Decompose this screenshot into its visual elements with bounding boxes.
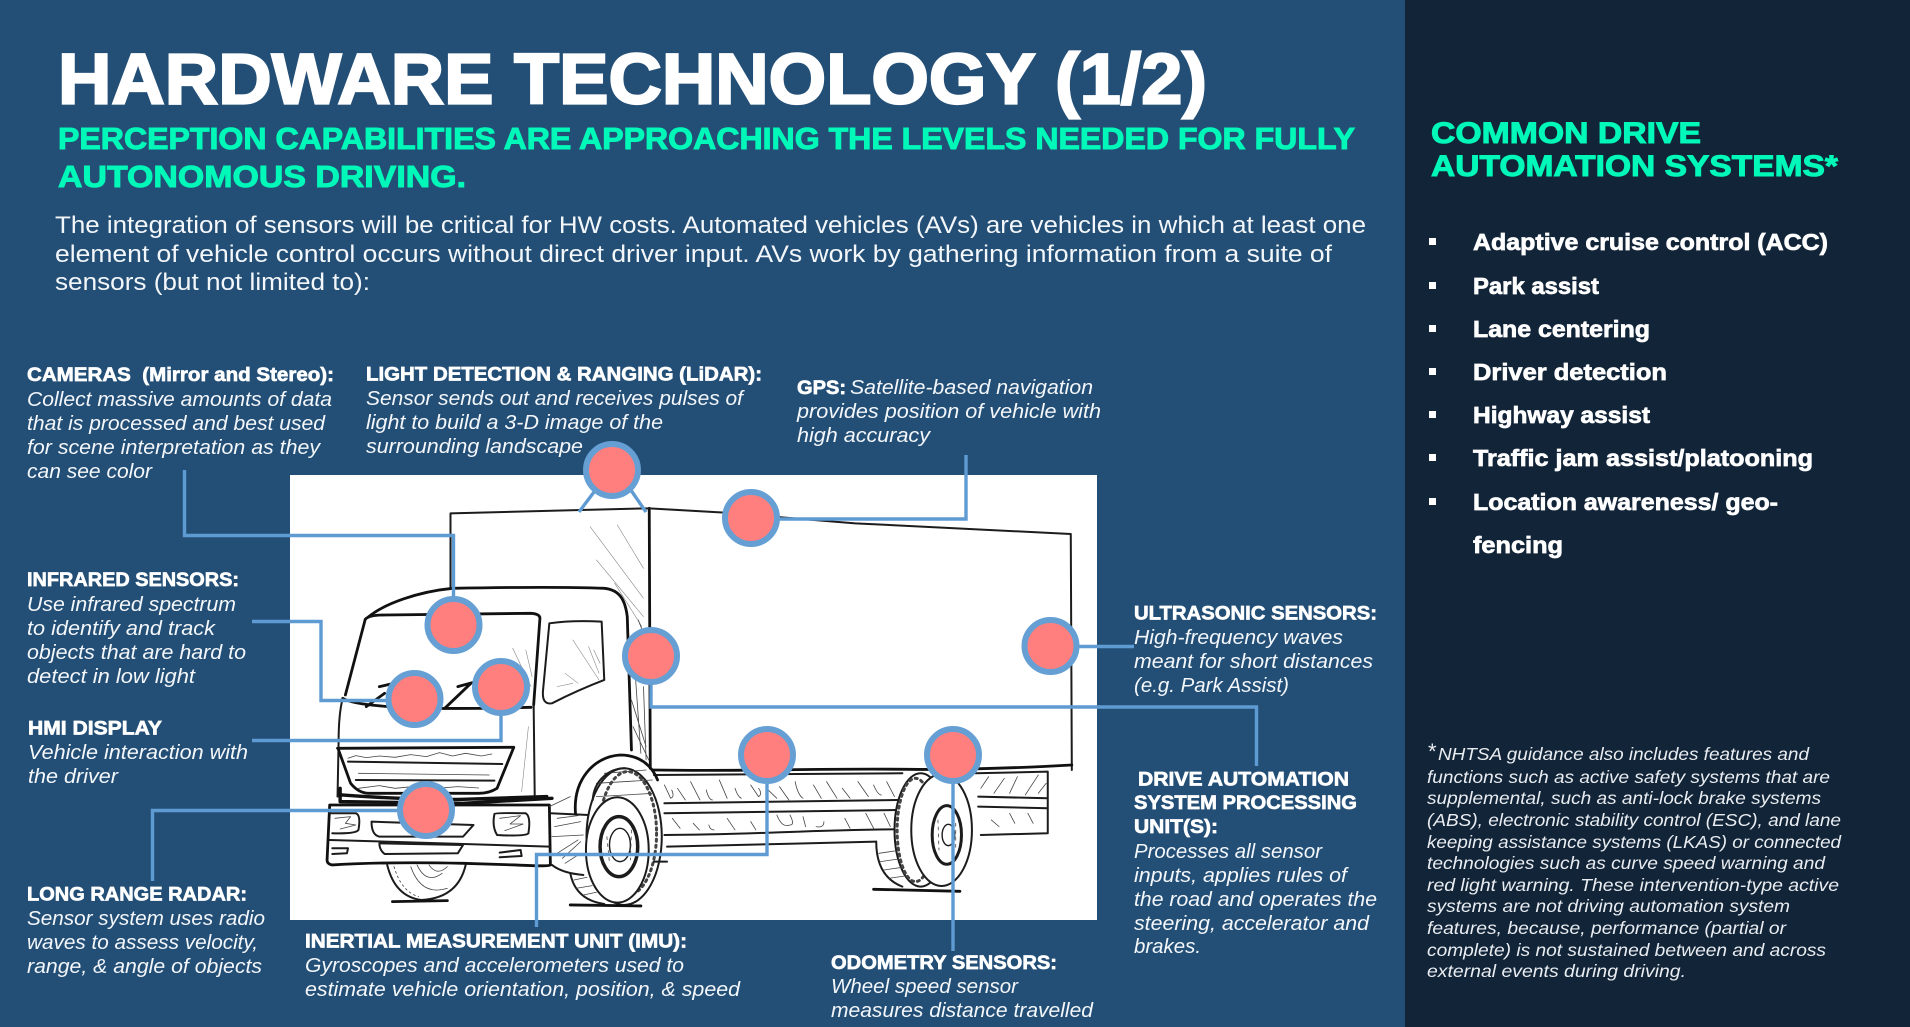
callout: drive automation system processing unit: UNIT(S): <box>1134 817 1218 838</box>
title: HARDWARE TECHNOLOGY (1/2) <box>58 40 1207 120</box>
callout: GPS: Satellite-based navigation <box>850 377 1093 399</box>
intro paragraph: sensors (but not limited to): <box>55 269 370 296</box>
callout: long range radar <box>27 784 452 978</box>
callout: GPS <box>725 377 1101 544</box>
callout: infrared sensors <box>27 570 440 725</box>
callout: inertial measurement unit: Gyroscopes and accelerometers used to <box>305 955 684 977</box>
callout: drive automation system processing unit: Processes all sensor <box>1134 841 1323 863</box>
callout: cameras: CAMERAS (Mirror and Stereo): <box>27 365 334 386</box>
subtitle <box>58 121 1355 194</box>
callout: odometry sensors: Wheel speed sensor <box>831 976 1019 998</box>
list: drive automation systems: Adaptive cruise control (ACC) <box>1473 229 1828 255</box>
callout: inertial measurement unit: estimate vehicle orientation, position, & speed <box>305 979 741 1001</box>
list: drive automation systems: Lane centering <box>1473 316 1650 342</box>
callout: drive automation system processing unit: the road and operates the <box>1134 889 1377 911</box>
callout: drive automation system processing unit: SYSTEM PROCESSING <box>1134 793 1357 814</box>
callout: drive automation system processing unit <box>625 630 1377 958</box>
callout: cameras: that is processed and best used <box>27 413 326 435</box>
callout: infrared sensors: detect in low light <box>27 666 197 688</box>
callout: ultrasonic sensors <box>1024 604 1377 697</box>
callout: LiDAR: LIGHT DETECTION & RANGING (LiDAR): <box>366 364 762 386</box>
intro paragraph: element of vehicle control occurs without direct driver input. AVs work by gathering information from a suite of <box>55 241 1332 268</box>
callout: infrared sensors: objects that are hard to <box>27 642 246 664</box>
callout: odometry sensors: ODOMETRY SENSORS: <box>831 953 1057 974</box>
subtitle: PERCEPTION CAPABILITIES ARE APPROACHING THE LEVELS NEEDED FOR FULLY <box>58 121 1355 156</box>
list: drive automation systems: Highway assist <box>1473 402 1650 428</box>
intro paragraph <box>55 212 1366 296</box>
callout: odometry sensors: measures distance travelled <box>831 1000 1094 1022</box>
list: drive automation systems <box>1429 229 1828 558</box>
callout: ultrasonic sensors: ULTRASONIC SENSORS: <box>1134 604 1377 624</box>
callout: infrared sensors: Use infrared spectrum <box>27 594 236 616</box>
callout: GPS: provides position of vehicle with <box>796 401 1101 423</box>
footnote: keeping assistance systems (LKAS) or connected <box>1427 832 1842 852</box>
callout: long range radar: waves to assess velocity, <box>27 932 258 954</box>
footnote: * <box>1428 739 1437 764</box>
truck illustration <box>327 508 1072 906</box>
callout: ultrasonic sensors: (e.g. Park Assist) <box>1134 675 1289 697</box>
callout: long range radar: Sensor system uses radio <box>27 908 265 930</box>
footnote: external events during driving. <box>1427 961 1686 981</box>
callout: long range radar: LONG RANGE RADAR: <box>27 884 247 906</box>
callout: GPS: high accuracy <box>797 425 931 447</box>
callout: drive automation system processing unit: DRIVE AUTOMATION <box>1138 770 1349 790</box>
callout: LiDAR: surrounding landscape <box>366 436 583 458</box>
footnote: features, because, performance (partial or <box>1427 918 1787 938</box>
callout: drive automation system processing unit: steering, accelerator and <box>1134 913 1370 935</box>
sidebar heading: COMMON DRIVE <box>1431 117 1701 150</box>
list: drive automation systems: Location awareness/ geo- <box>1473 489 1778 515</box>
subtitle: AUTONOMOUS DRIVING. <box>58 159 466 194</box>
footnote: supplemental, such as anti-lock brake systems <box>1427 788 1821 808</box>
footnote: red light warning. These intervention-type active <box>1427 875 1839 895</box>
list: drive automation systems: Traffic jam assist/platooning <box>1473 445 1813 471</box>
list: drive automation systems: Park assist <box>1473 273 1599 299</box>
list: drive automation systems: Driver detection <box>1473 359 1667 385</box>
callout: infrared sensors: INFRARED SENSORS: <box>27 570 239 591</box>
panel: right sidebar <box>1405 0 1910 1027</box>
callout: LiDAR <box>366 364 762 512</box>
callout: odometry sensors <box>831 729 1094 1022</box>
callout: LiDAR: Sensor sends out and receives pulses of <box>366 388 746 410</box>
callout: drive automation system processing unit: brakes. <box>1134 936 1201 958</box>
footnote <box>1427 739 1842 981</box>
intro paragraph: The integration of sensors will be critical for HW costs. Automated vehicles (AVs) are vehicles in which at least one <box>55 212 1366 239</box>
footnote: NHTSA guidance also includes features and <box>1438 744 1810 764</box>
callout: ultrasonic sensors: High-frequency waves <box>1134 627 1343 649</box>
footnote: technologies such as curve speed warning and <box>1427 853 1826 873</box>
sidebar heading <box>1431 117 1838 183</box>
callout: HMI display: Vehicle interaction with <box>28 742 248 764</box>
callout: inertial measurement unit: INERTIAL MEASUREMENT UNIT (IMU): <box>305 932 687 952</box>
callout: HMI display: the driver <box>28 766 119 788</box>
callout: cameras <box>27 365 480 651</box>
sidebar heading: AUTOMATION SYSTEMS* <box>1431 150 1838 183</box>
callout: cameras: for scene interpretation as they <box>27 437 321 459</box>
callout: LiDAR: light to build a 3-D image of the <box>366 412 663 434</box>
callout: drive automation system processing unit: inputs, applies rules of <box>1134 865 1350 887</box>
list: drive automation systems: fencing <box>1473 532 1563 558</box>
callout: long range radar: range, & angle of objects <box>27 956 262 978</box>
callout: GPS: GPS: <box>797 378 846 399</box>
footnote: (ABS), electronic stability control (ESC), and lane <box>1427 810 1841 830</box>
callout: ultrasonic sensors: meant for short distances <box>1134 651 1373 673</box>
footnote: systems are not driving automation system <box>1427 896 1790 916</box>
callout: HMI display <box>28 661 527 788</box>
footnote: complete) is not sustained between and across <box>1427 940 1826 960</box>
callout: cameras: can see color <box>27 461 153 483</box>
callout: cameras: Collect massive amounts of data <box>27 389 332 411</box>
callout: infrared sensors: to identify and track <box>27 618 216 640</box>
panel: truck illustration background <box>290 475 1097 920</box>
callout: HMI display: HMI DISPLAY <box>28 718 162 740</box>
footnote: functions such as active safety systems that are <box>1427 767 1830 787</box>
callout: inertial measurement unit <box>305 729 793 1001</box>
